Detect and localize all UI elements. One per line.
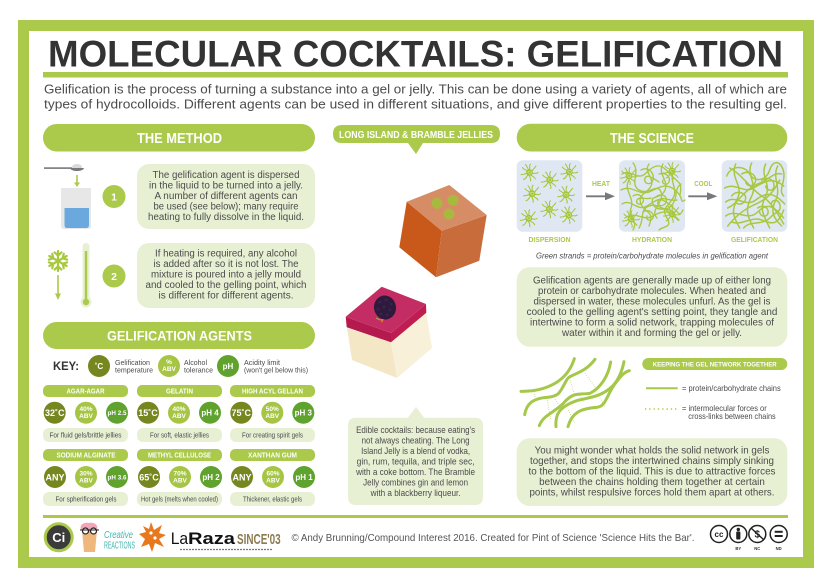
agent: xanthan gum: pH 1	[295, 473, 313, 482]
callout: edible cocktails	[348, 407, 483, 505]
agent: high acyl gellan: For creating spirit gels	[242, 433, 303, 440]
panel: gelification agents	[43, 322, 315, 506]
step number 2	[102, 264, 126, 288]
agent: xanthan gum: XANTHAN GUM	[248, 452, 297, 460]
copyright line: © Andy Brunning/Compound Interest 2016. Created for Pint of Science 'Science Hits the Bar'.	[292, 532, 694, 544]
panel: long island and bramble jellies	[333, 125, 500, 505]
caption: green strands: Green strands = protein/carbohydrate molecules in gelification agent	[536, 250, 769, 260]
text box: forces explanation: points, whilst respulsive forces hold them apart at others.	[530, 488, 774, 498]
step number 2: 2	[111, 271, 117, 283]
icon: creative commons licence badges	[710, 526, 787, 551]
text box: step 1: heating to fully dissolve in the liquid.	[148, 212, 304, 223]
diagram: hydration: HYDRATION	[632, 235, 672, 244]
legend: chains: cross-links between chains	[688, 411, 776, 421]
arrow: heat	[586, 179, 615, 200]
icon: spoon over beaker	[44, 164, 91, 229]
text box: forces explanation: to the bottom of the liquid. This is due to attractive forces	[528, 466, 776, 478]
agent: sodium alginate: 30%	[79, 470, 93, 477]
logo: creative reactions	[104, 522, 166, 552]
logo: compound interest	[45, 524, 72, 551]
agent: xanthan gum	[230, 449, 315, 506]
agent: high acyl gellan: HIGH ACYL GELLAN	[242, 388, 303, 396]
agent: gelatin: For soft, elastic jellies	[150, 433, 209, 440]
icon: snowflake with down arrow	[48, 251, 68, 300]
diagram: gelification	[722, 160, 787, 244]
intro text: types of hydrocolloids. Different agents can be used in different situations, and give different properties to the resulting gel.	[44, 96, 787, 112]
callout: edible cocktails: not always cheating. The Long	[362, 435, 470, 446]
agent: gelatin: GELATIN	[166, 388, 193, 396]
text box: step 1	[137, 164, 315, 229]
heading: keeping the gel network together	[642, 358, 787, 370]
heading: gelification agents: GELIFICATION AGENTS	[107, 328, 252, 344]
legend: chains	[645, 383, 781, 421]
heading: the science: THE SCIENCE	[610, 131, 694, 147]
callout: edible cocktails: Edible cocktails: because eating's	[356, 425, 475, 436]
agent: sodium alginate: pH 3.6	[108, 474, 127, 482]
agent: gelatin: ABV	[172, 413, 187, 420]
agent: xanthan gum: 60%	[266, 470, 280, 477]
agent: methyl cellulose	[137, 449, 222, 506]
agent: agar-agar: AGAR-AGAR	[66, 388, 104, 396]
logo: la raza since 03: La	[171, 529, 189, 548]
legend: chains: = protein/carbohydrate chains	[682, 383, 781, 393]
legend: chains: = intermolecular forces or	[682, 403, 767, 413]
intro text: Gelification is the process of turning a substance into a gel or jelly. This can be done using a variety of agents, all of which are	[44, 82, 787, 96]
step number 1	[102, 185, 126, 208]
heading callout: long island and bramble jellies: LONG ISLAND & BRAMBLE JELLIES	[339, 130, 493, 141]
logo: compound interest: Ci	[52, 530, 65, 545]
agent: high acyl gellan	[230, 385, 315, 442]
text box: gelification agents explanation: water within it and forming the gel or jelly.	[561, 328, 742, 339]
logo: pint of science	[80, 523, 99, 552]
agent: methyl cellulose: 70%	[173, 470, 187, 477]
text box: step 1: in the liquid to be turned into a jelly.	[149, 180, 303, 192]
logo: la raza since 03: Raza	[188, 529, 236, 548]
title: MOLECULAR COCKTAILS: GELIFICATION	[48, 32, 783, 74]
text box: step 2: mixture is poured into a jelly mould	[151, 270, 301, 281]
agent: gelatin	[137, 385, 222, 442]
text box: forces explanation: between the chains holding them together at certain	[539, 477, 765, 488]
heading: keeping the gel network together: KEEPING THE GEL NETWORK TOGETHER	[653, 361, 777, 368]
agent: methyl cellulose: METHYL CELLULOSE	[148, 452, 211, 460]
text box: gelification agents explanation: intertwine to form a solid network, trapping molecules of	[530, 318, 774, 328]
arrow: heat: HEAT	[592, 179, 610, 188]
text box: forces explanation	[517, 438, 787, 506]
icon: creative commons licence badges: BY	[735, 546, 741, 551]
logo: la raza since 03: SINCE'03	[237, 531, 281, 548]
text box: step 1: A number of different agents can	[154, 191, 298, 202]
agent: high acyl gellan: 75˚C	[232, 408, 252, 418]
text box: step 2: is added after so it is not lost. The	[154, 259, 299, 270]
agent: agar-agar: ABV	[79, 413, 94, 420]
logo: la raza since 03	[171, 529, 281, 550]
arrow: cool: COOL	[694, 179, 713, 188]
icon: creative commons licence badges: NC	[754, 546, 760, 551]
text box: step 1: The gelification agent is dispersed	[152, 170, 300, 181]
heading: the method	[43, 124, 315, 152]
key	[53, 355, 308, 377]
heading: gelification agents	[43, 322, 315, 349]
agent: gelatin: pH 4	[201, 408, 219, 418]
diagram: gelification: GELIFICATION	[731, 235, 778, 244]
key: %	[166, 359, 172, 366]
agent: sodium alginate	[43, 449, 128, 506]
key: KEY:	[53, 361, 79, 373]
agent: high acyl gellan: ABV	[265, 413, 280, 420]
agent: gelatin: 40%	[172, 406, 186, 413]
key: tolerance	[184, 365, 213, 374]
agent: sodium alginate: ABV	[79, 477, 94, 484]
text box: gelification agents explanation: dispersed in water, these molecules unfurl. As the gel is	[534, 296, 770, 308]
agent: high acyl gellan: 50%	[266, 406, 279, 413]
text box: step 2	[137, 243, 315, 308]
agent: high acyl gellan: pH 3	[295, 408, 313, 418]
agent: gelatin: 15˚C	[138, 408, 158, 418]
logo: creative reactions: Creative	[104, 530, 133, 541]
agent: sodium alginate: ANY	[45, 472, 65, 482]
step number 1: 1	[111, 192, 117, 204]
agent: methyl cellulose: ABV	[173, 477, 188, 484]
icon: creative commons licence badges: $	[755, 530, 761, 540]
key: ˚C	[95, 362, 103, 371]
text box: gelification agents explanation	[517, 267, 787, 347]
callout: edible cocktails: gin, rum, tequila, and triple sec,	[357, 456, 475, 467]
agent: methyl cellulose: 65˚C	[139, 472, 159, 482]
diagram: dispersion: DISPERSION	[528, 235, 570, 244]
callout: edible cocktails: with a blackberry liqueur.	[370, 488, 461, 499]
key: Acidity limit	[244, 358, 281, 367]
callout: edible cocktails: Island Jelly is a blend of vodka,	[361, 446, 470, 457]
footer	[43, 515, 788, 552]
agent: sodium alginate: For spherification gels	[56, 497, 117, 504]
text box: step 2: If heating is required, any alcohol	[155, 249, 297, 260]
agent: agar-agar	[43, 385, 128, 442]
callout: edible cocktails: with a coke bottom. The Bramble	[355, 467, 475, 478]
agent: xanthan gum: ANY	[232, 472, 252, 482]
heading callout: long island and bramble jellies	[333, 125, 500, 154]
text box: step 1: be used (see below); many require	[154, 202, 299, 212]
logo: creative reactions: REACTIONS	[104, 540, 135, 552]
key: pH	[223, 362, 234, 371]
panel: the method	[43, 124, 315, 308]
agent: agar-agar: For fluid gels/brittle jellies	[50, 433, 122, 440]
agent: xanthan gum: Thickener, elastic gels	[243, 497, 302, 504]
diagram: hydration	[619, 160, 685, 244]
key: temperature	[115, 365, 153, 374]
key: Alcohol	[184, 358, 207, 367]
icon: creative commons licence badges: ND	[776, 546, 782, 551]
agent: agar-agar: 40%	[79, 406, 93, 413]
agent: xanthan gum: ABV	[266, 477, 281, 484]
arrow: cool	[688, 179, 717, 200]
key: Gelification	[115, 358, 150, 367]
text box: gelification agents explanation: cooled to the gelling agent's setting point, they tangle and	[527, 307, 778, 318]
icon: creative commons licence badges: cc	[715, 530, 724, 539]
agent: agar-agar: 32˚C	[45, 408, 65, 418]
intro text	[44, 82, 787, 112]
icon: thermometer	[80, 243, 92, 308]
heading: the method: THE METHOD	[137, 131, 222, 147]
text box: step 2: and cooled to the gelling point, which	[146, 280, 306, 291]
text box: step 2: is different for different agents.	[158, 291, 294, 302]
callout: edible cocktails: Jelly combines gin and lemon	[363, 477, 468, 488]
agent: methyl cellulose: Hot gels (melts when cooled)	[141, 497, 218, 504]
agent: methyl cellulose: pH 2	[202, 473, 220, 482]
key: (won't gel below this)	[244, 365, 308, 374]
diagram: dispersion	[517, 160, 582, 244]
text box: forces explanation: You might wonder what holds the solid network in gels	[535, 446, 769, 456]
key: ABV	[162, 366, 177, 373]
agent: agar-agar: pH 2.5	[108, 410, 127, 417]
illustration: long island jelly cube	[399, 185, 487, 277]
agent: sodium alginate: SODIUM ALGINATE	[56, 452, 116, 460]
text box: gelification agents explanation: protein or carbohydrate molecules. When heated and	[538, 286, 766, 297]
text box: gelification agents explanation: Gelification agents are generally made up of either long	[533, 276, 771, 286]
diagram: linked chains	[521, 359, 629, 427]
text box: forces explanation: together, and stops the intertwined chains simply sinking	[530, 456, 774, 467]
panel: the science	[517, 124, 787, 506]
heading: the science	[517, 124, 787, 152]
illustration: bramble jelly cube	[346, 287, 432, 378]
